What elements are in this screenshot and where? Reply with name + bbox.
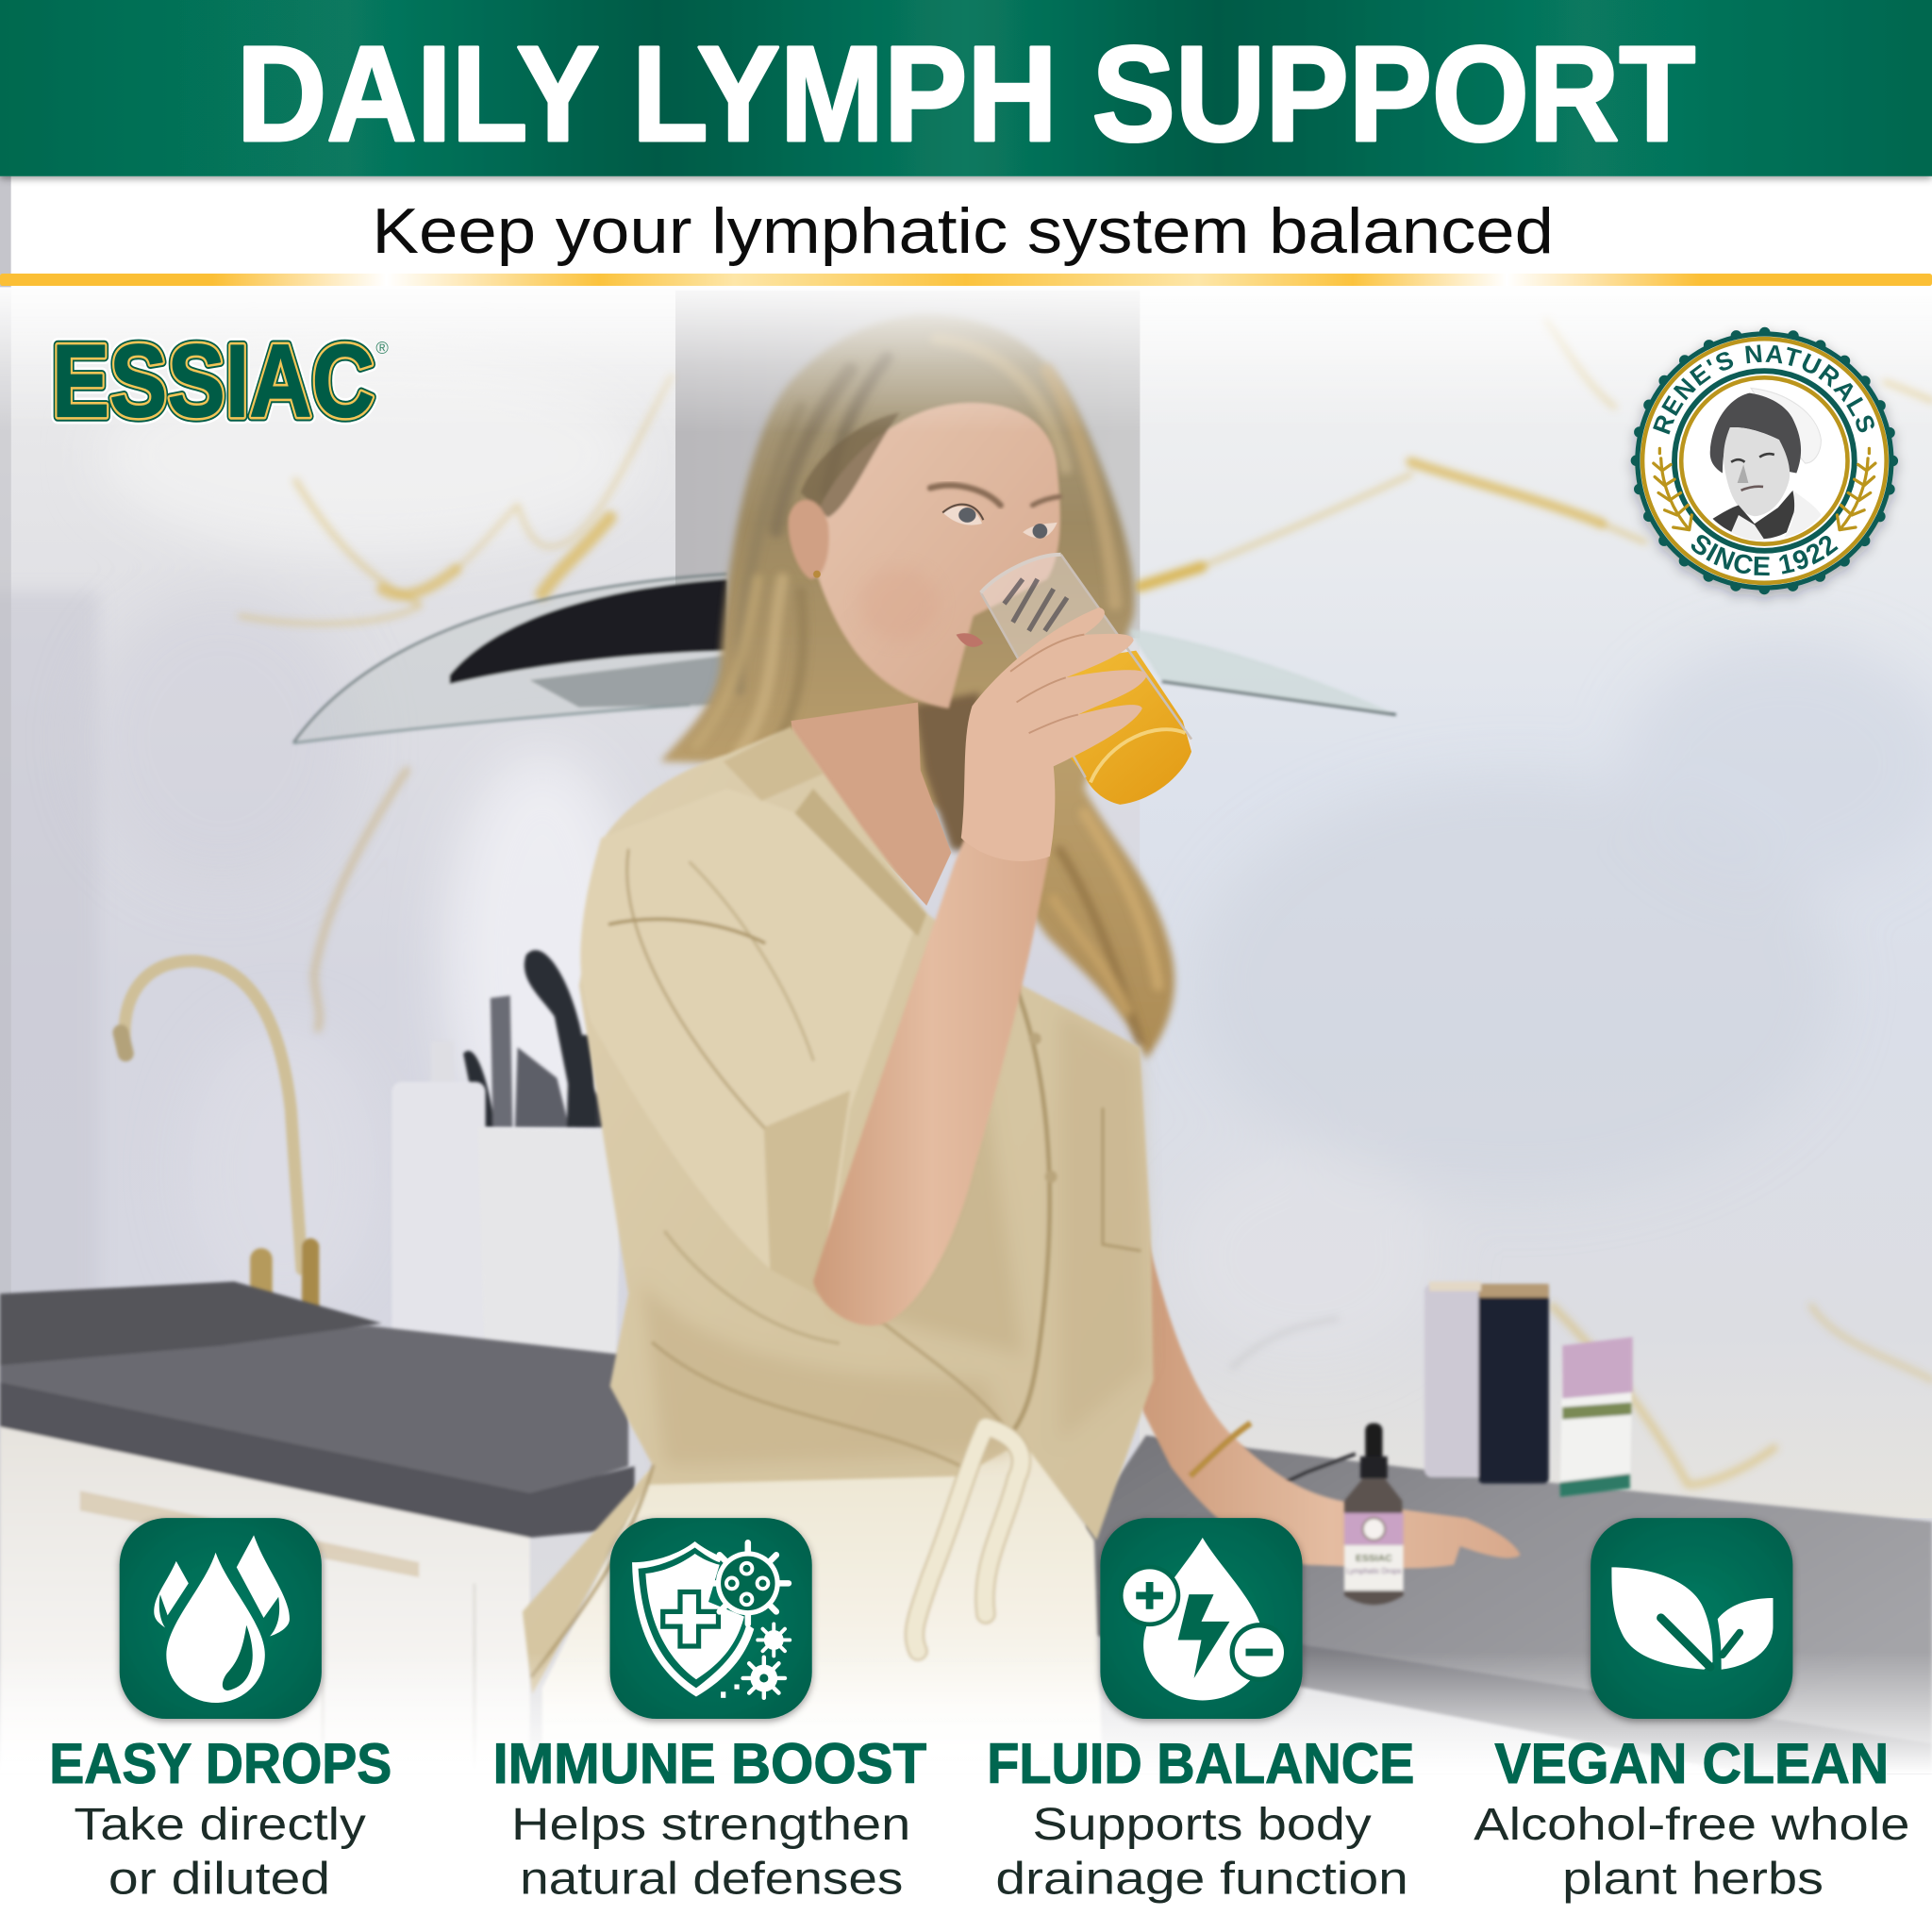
top haze	[0, 286, 1932, 434]
feature: easy drops: or diluted	[108, 1854, 330, 1905]
collar	[724, 727, 823, 801]
heading: VEGAN CLEAN	[1494, 1732, 1889, 1795]
badge: Rene's Naturals: SINCE 1922	[1690, 535, 1839, 575]
left grey edge strip	[0, 176, 11, 287]
cheek blush	[860, 567, 939, 641]
canisters on counter	[1424, 1281, 1549, 1484]
hair shadow by ear	[801, 413, 899, 518]
ear	[789, 500, 829, 579]
right marble wall	[1140, 286, 1932, 1518]
product box	[1560, 1337, 1633, 1497]
heading: FLUID BALANCE	[987, 1732, 1414, 1795]
drawstring bow	[914, 1426, 1022, 1651]
feature: easy drops	[49, 1518, 391, 1905]
shirt	[523, 727, 1154, 1694]
utensil holder	[478, 1127, 623, 1370]
gold marble veins	[241, 321, 1932, 1485]
feature: fluid balance	[987, 1518, 1414, 1905]
subtitle: Keep your lymphatic system balanced	[372, 196, 1554, 267]
dark hair behind neck	[914, 692, 979, 850]
logo: ESSIAC: ESSIAC	[52, 324, 375, 439]
badge: Rene's Naturals	[1625, 326, 1904, 605]
arm resting on counter	[1140, 1232, 1521, 1568]
feature: vegan clean	[1474, 1518, 1909, 1905]
rolled sleeve	[580, 789, 918, 1296]
paper towel roll	[345, 1041, 486, 1357]
virus	[708, 1542, 789, 1624]
description: Supports body	[1033, 1799, 1373, 1850]
woman drinking juice	[523, 314, 1521, 1774]
small virus one	[758, 1624, 790, 1656]
heading: IMMUNE BOOST	[492, 1732, 926, 1795]
cloud tones in marble	[86, 358, 1932, 1368]
subtitle band	[11, 176, 1932, 274]
header band	[0, 0, 1932, 176]
logo: ESSIAC: ESSIAC	[52, 324, 375, 439]
range hood chimney	[675, 291, 1140, 639]
hand	[961, 608, 1147, 861]
glass range hood	[293, 575, 1396, 743]
logo: ESSIAC: ESSIAC	[52, 324, 375, 439]
back hair	[660, 314, 1174, 1059]
soft shirt shadows	[641, 1010, 1146, 1466]
bottom white fade	[0, 1651, 1932, 1774]
hair strands	[696, 339, 1158, 1041]
right counter	[1084, 1436, 1932, 1811]
feature: vegan clean: plant herbs	[1562, 1854, 1824, 1905]
trousers	[542, 1429, 1103, 1774]
glass of juice	[981, 555, 1191, 805]
logo: ESSIAC: ESSIAC	[52, 324, 375, 439]
small virus two	[743, 1657, 785, 1698]
lips	[957, 633, 983, 647]
product dropper bottle: Lymphatic Drops	[1346, 1567, 1402, 1575]
product dropper bottle	[1344, 1424, 1404, 1605]
heading: EASY DROPS	[49, 1732, 391, 1795]
badge text: RENE'S NATURALS	[1653, 344, 1874, 434]
registered mark: ®	[375, 338, 389, 358]
eyebrows and eyes	[930, 485, 1059, 506]
icon: water drops	[120, 1518, 322, 1719]
description: Take directly	[74, 1799, 367, 1850]
kitchen utensils	[463, 950, 623, 1127]
feature: immune boost	[492, 1518, 926, 1905]
gold divider	[0, 274, 1932, 286]
feature: immune boost: natural defenses	[520, 1854, 903, 1905]
icon: leaves	[1591, 1518, 1792, 1719]
feature: fluid balance: drainage function	[995, 1854, 1408, 1905]
icon: shield and viruses	[610, 1518, 812, 1719]
forearm	[813, 832, 1050, 1325]
description: Alcohol-free whole	[1474, 1799, 1909, 1850]
left counter	[0, 1281, 635, 1932]
icon: drop with bolt	[1100, 1518, 1303, 1719]
shirt folds	[532, 850, 1140, 1675]
neck and chest	[791, 702, 951, 906]
faucet	[121, 961, 310, 1331]
description: Helps strengthen	[511, 1799, 910, 1850]
face	[789, 403, 1060, 708]
left wall tone band	[0, 591, 98, 1392]
laurels	[1654, 448, 1875, 530]
product dropper bottle: ESSIAC	[1356, 1554, 1392, 1564]
title: DAILY LYMPH SUPPORT	[237, 19, 1695, 170]
portrait	[1710, 388, 1821, 541]
